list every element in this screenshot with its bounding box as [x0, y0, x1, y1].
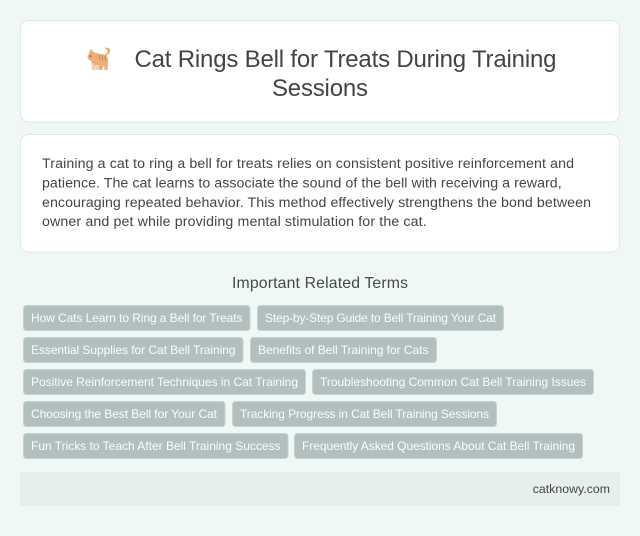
title text: Sessions: [272, 75, 368, 102]
tag: choosing the best bell: [24, 402, 225, 426]
tag: faq: [294, 434, 582, 458]
tag list: [24, 306, 594, 458]
tag: benefits: [250, 338, 436, 362]
tag: faq: Frequently Asked Questions About Cat Bell Training: [302, 439, 575, 453]
tag: essential supplies: [24, 338, 243, 362]
tag: troubleshooting: Troubleshooting Common Cat Bell Training Issues: [320, 375, 586, 389]
footer bar: catknowy.com: [533, 482, 610, 496]
panel: intro paragraph: Training a cat to ring a bell for treats relies on consistent positive reinforcement and: [42, 156, 574, 172]
tag: step-by-step guide: [258, 306, 504, 330]
tag: troubleshooting: [312, 370, 594, 394]
tag: step-by-step guide: Step-by-Step Guide to Bell Training Your Cat: [265, 311, 497, 325]
panel: title card: [20, 20, 620, 122]
tag: positive reinforcement: Positive Reinforcement Techniques in Cat Training: [31, 375, 298, 389]
tag: fun tricks: Fun Tricks to Teach After Bell Training Success: [31, 439, 280, 453]
tag: essential supplies: Essential Supplies for Cat Bell Training: [31, 343, 236, 357]
footer bar: [20, 472, 620, 506]
tag: fun tricks: [24, 434, 288, 458]
tag: tracking progress: Tracking Progress in Cat Bell Training Sessions: [240, 407, 489, 421]
panel: intro paragraph: [20, 134, 620, 252]
icon: orange cat: [88, 48, 110, 70]
heading: important related terms: Important Related Terms: [232, 275, 408, 292]
panel: intro paragraph: owner and pet while providing mental stimulation for the cat.: [42, 214, 427, 230]
tag: positive reinforcement: [24, 370, 306, 394]
title text: Cat Rings Bell for Treats During Training: [134, 46, 556, 73]
panel: intro paragraph: patience. The cat learns to associate the sound of the bell with receiving a reward,: [42, 176, 562, 192]
title text: [134, 46, 556, 102]
panel: intro paragraph: encouraging repeated behavior. This method effectively strengthens the bond between: [42, 195, 591, 211]
tag: how cats learn: How Cats Learn to Ring a Bell for Treats: [31, 311, 242, 325]
tag: how cats learn: [24, 306, 250, 330]
tag: tracking progress: [232, 402, 496, 426]
tag: choosing the best bell: Choosing the Best Bell for Your Cat: [31, 407, 218, 421]
tag: benefits: Benefits of Bell Training for Cats: [258, 343, 428, 357]
